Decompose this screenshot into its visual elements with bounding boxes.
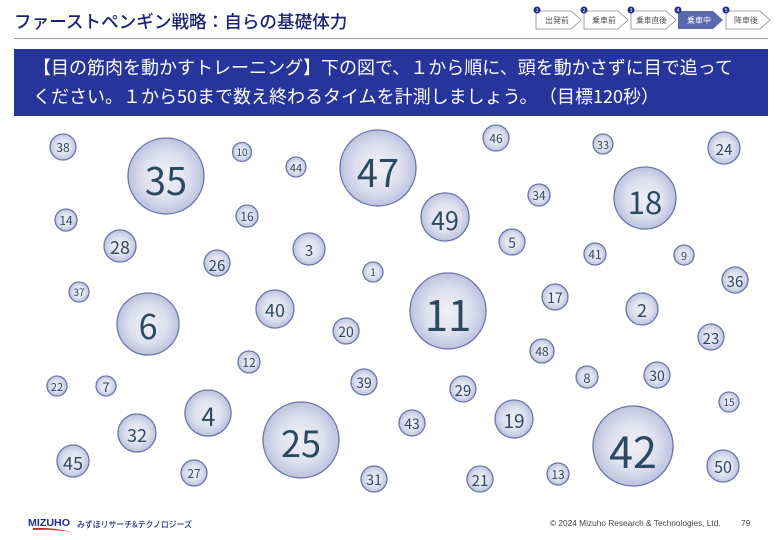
circle 18: 18 [628,178,662,223]
circle 17 [542,284,568,310]
circle 38: 38 [56,139,70,156]
step 3 [628,6,676,29]
circle 34: 34 [532,187,546,204]
circle 45 [57,445,89,477]
circle 39 [351,369,377,395]
circle 31 [361,466,387,492]
circle 5: 5 [508,233,516,253]
circle 35: 35 [145,151,187,206]
instruction banner [14,49,768,116]
circle 44: 44 [290,160,302,176]
circle 3 [293,233,325,265]
circle 39: 39 [356,373,372,393]
circle 10: 10 [236,144,248,159]
circle 48 [530,339,554,363]
circle 32: 32 [127,422,147,448]
instruction banner: （目標120秒） [539,83,659,109]
circle 5 [499,229,525,255]
circle 25 [263,402,339,478]
circle 33 [593,134,613,154]
circle 42 [593,406,673,486]
circle 9: 9 [681,248,687,264]
circle 2: 2 [637,297,647,323]
circle 32 [118,414,156,452]
circle 26: 26 [209,255,225,276]
step 4 active: 4 [677,7,680,14]
circle 45: 45 [63,450,83,476]
circle 13: 13 [551,466,565,483]
circle 37 [69,282,89,302]
circle 33: 33 [597,137,609,153]
circle 49 [421,193,469,241]
circle 12 [238,351,260,373]
circle 7 [96,376,116,396]
step 4 active [674,6,723,29]
circle 14: 14 [59,212,73,229]
copyright: © 2024 Mizuho Research & Technologies, Ltd. [550,518,721,528]
circle 8 [576,366,598,388]
circle 28 [104,230,136,262]
page number: 79 [741,518,751,528]
circle 29 [450,376,476,402]
step 5: 5 [725,7,728,14]
circle 49: 49 [431,202,459,238]
circle 23: 23 [703,328,719,349]
circle 46 [483,125,509,151]
circle 50 [707,450,739,482]
circle 10 [232,142,252,162]
step 2: 2 [583,7,586,14]
step 3: 3 [630,7,633,14]
circle 27 [181,460,207,486]
logo: Mizuho: みずほリサーチ&テクノロジーズ [77,518,192,530]
title: ファーストペンギン戦略：自らの基礎体力 [14,9,347,34]
circle 30 [644,362,670,388]
circle 2 [626,293,658,325]
circle 20 [333,318,359,344]
circle 35 [128,138,204,214]
circle 44 [286,157,306,177]
circle 26 [204,250,230,276]
step 5 [722,6,770,29]
circle 29: 29 [455,380,471,401]
circle 36 [722,267,748,293]
progress steps [534,6,770,29]
circle 16 [236,205,258,227]
circle 6: 6 [139,300,157,349]
instruction banner: 【目の筋肉を動かすトレーニング】下の図で、１から順に、頭を動かさずに目で追って [33,54,733,80]
circle 4: 4 [202,398,216,434]
circle 47 [340,130,416,206]
circle 13 [547,463,569,485]
circle 43: 43 [404,414,420,434]
circle 21 [467,466,493,492]
number circles [47,125,748,492]
circle 46: 46 [489,130,503,147]
step 2: 乗車前 [592,15,616,26]
step 1 [534,6,581,29]
circle 38 [50,134,76,160]
circle 9 [674,245,694,265]
circle 8: 8 [583,368,591,387]
step 3: 乗車直後 [636,15,667,26]
circle 21: 21 [472,470,488,491]
circle 37: 37 [73,284,85,299]
circle 17: 17 [547,288,563,308]
instruction banner: ください。１から50まで数え終わるタイムを計測しましょう。 [33,83,538,109]
circle 12: 12 [242,354,256,371]
circle 19: 19 [503,407,525,434]
step 4 active: 乗車中 [687,15,711,26]
circle 4 [185,390,231,436]
circle 20: 20 [338,322,354,342]
circle 22 [47,376,67,396]
circle 43 [399,410,425,436]
circle 40 [256,290,294,328]
circle 24: 24 [716,139,732,160]
logo: Mizuho: MIZUHO [28,517,70,529]
circle 19 [495,400,533,438]
circle 15 [719,392,739,412]
circle 41 [584,243,606,265]
circle 41: 41 [588,246,602,263]
circle 3: 3 [305,240,313,261]
circle 47: 47 [357,143,399,198]
circle 40: 40 [265,297,285,323]
circle 24 [708,132,740,164]
step 5: 降車後 [734,15,758,26]
circle 42: 42 [609,419,657,481]
circle 23 [698,324,724,350]
circle 11 [410,273,486,349]
circle 16: 16 [240,208,254,225]
circle 27: 27 [187,465,201,482]
circle 25: 25 [281,416,321,468]
circle 36: 36 [727,271,743,292]
circle 11: 11 [425,283,471,344]
logo: Mizuho [28,517,192,532]
circle 22: 22 [51,379,63,395]
step 2 [580,6,628,29]
circle 6 [117,293,179,355]
circle 48: 48 [535,343,549,360]
step 1: 1 [536,7,539,14]
circle 28: 28 [110,234,130,260]
circle 30: 30 [649,366,665,386]
circle 34 [528,184,550,206]
circle 1 [363,262,383,282]
circle 31: 31 [366,470,382,490]
circle 1: 1 [370,264,376,279]
circle 15: 15 [723,394,735,409]
circle 7: 7 [102,377,110,396]
title rule [14,38,768,39]
circle 14 [55,209,77,231]
circle 50: 50 [714,454,732,478]
step 1: 出発前 [545,15,569,26]
circle 18 [614,167,676,229]
